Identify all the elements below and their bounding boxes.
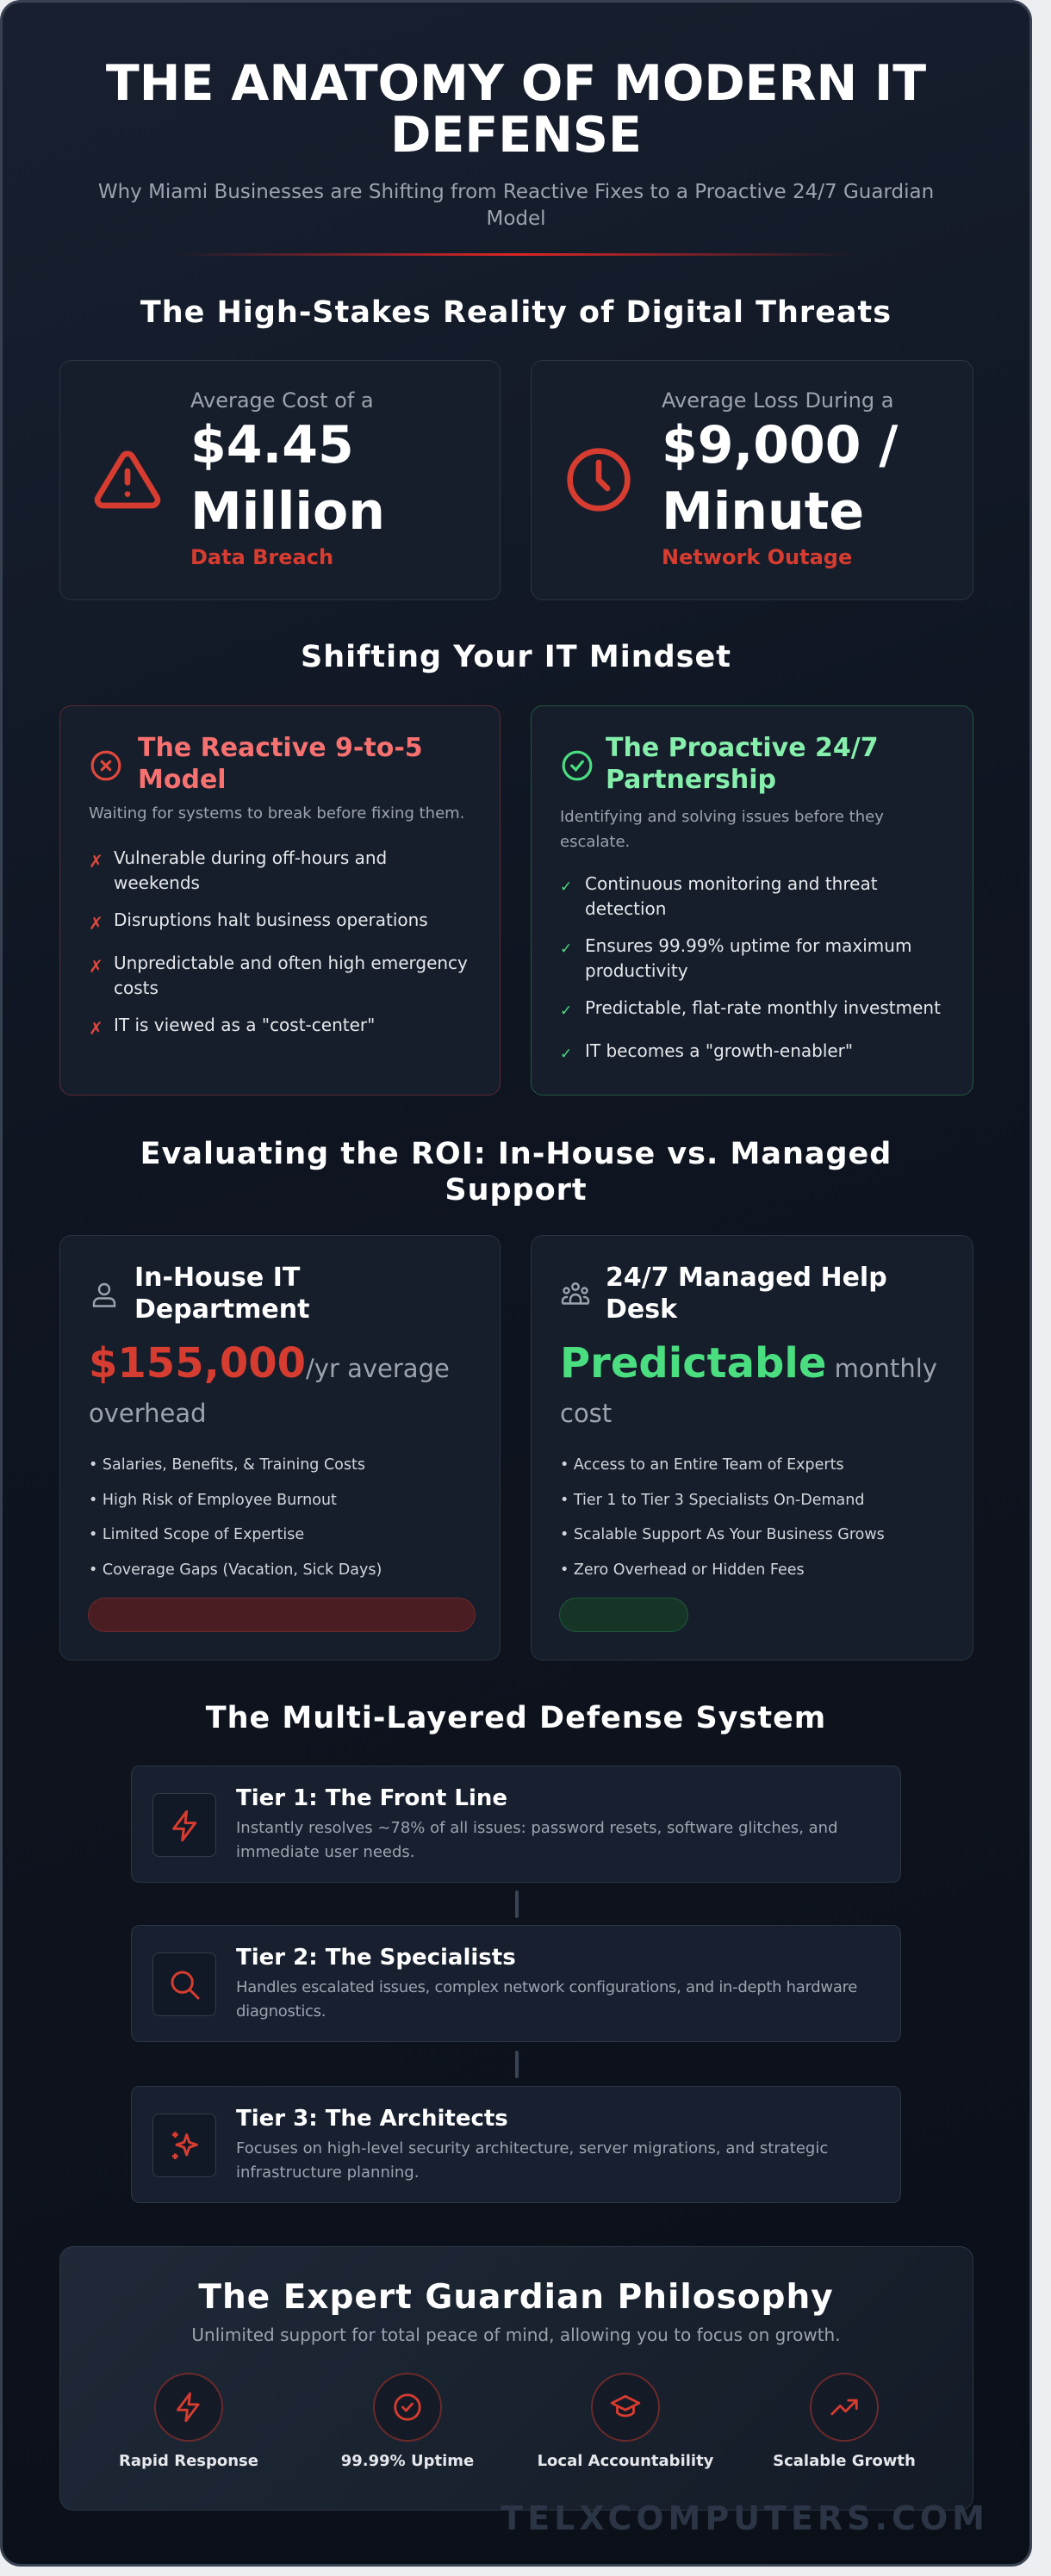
- card title: Model: [138, 765, 227, 795]
- card title: 24/7 Managed Help: [606, 1263, 887, 1293]
- list: benefits: ✓: [560, 1002, 572, 1020]
- description: Identifying and solving issues before they: [560, 808, 884, 826]
- price: $155,000/yr average overhead: [89, 1339, 450, 1428]
- card title: [606, 733, 879, 795]
- card title: Department: [134, 1294, 309, 1325]
- title: DEFENSE: [390, 107, 642, 164]
- card title: In-House IT: [134, 1263, 300, 1293]
- card title: [138, 733, 423, 795]
- list: benefits: Predictable, flat-rate monthly investment: [585, 997, 941, 1018]
- philosophy title: The Expert Guardian Philosophy: [198, 2278, 834, 2317]
- bar: cost: [88, 1598, 476, 1632]
- watermark: TELXCOMPUTERS.COM: [501, 2499, 989, 2537]
- list: drawbacks: weekends: [114, 872, 200, 893]
- panel: outage stat: [531, 360, 973, 600]
- list: benefits: • Tier 1 to Tier 3 Specialists On-Demand: [560, 1492, 864, 1509]
- list: drawbacks: ✗: [89, 1018, 103, 1039]
- price: Predictable monthly cost: [560, 1339, 937, 1428]
- list: benefits: • Scalable Support As Your Business Grows: [560, 1526, 885, 1543]
- panel: managed help desk: [531, 1235, 973, 1660]
- list: drawbacks: ✗: [89, 913, 103, 934]
- label: Scalable Growth: [773, 2452, 916, 2470]
- heading: high-stakes: The High-Stakes Reality of Digital Threats: [140, 295, 892, 330]
- list: benefits: Continuous monitoring and threat: [585, 873, 878, 894]
- stat text: Average Loss During a: [662, 388, 893, 413]
- stat text: Average Cost of a: [190, 388, 374, 413]
- icon: warning triangle: [95, 451, 160, 508]
- icon: x circle: [91, 751, 121, 780]
- connector: [515, 2051, 519, 2078]
- list: benefits: ✓: [560, 1046, 572, 1063]
- card title: [606, 1263, 887, 1325]
- panel: reactive model: [59, 705, 501, 1096]
- description: Waiting for systems to break before fixing them.: [89, 804, 464, 822]
- tier 3: Focuses on high-level security architecture, server migrations, and strategic infrastructure planning.: [236, 2139, 828, 2182]
- stat text: Minute: [662, 481, 864, 542]
- icon: check circle: [562, 751, 593, 780]
- heading: defense system: The Multi-Layered Defense System: [206, 1701, 826, 1735]
- icon: team: [562, 1282, 589, 1305]
- heading: ROI: Support: [445, 1173, 588, 1207]
- list: benefits: [560, 873, 941, 1063]
- tier 1: Tier 1: The Front Line: [236, 1785, 507, 1811]
- stat text: Data Breach: [190, 545, 333, 569]
- list: drawbacks: IT is viewed as a "cost-center": [114, 1015, 375, 1035]
- list: benefits: productivity: [585, 960, 688, 981]
- panel: philosophy: [59, 2246, 973, 2511]
- panel: proactive model: [531, 705, 973, 1096]
- heading: mindset: Shifting Your IT Mindset: [301, 640, 731, 674]
- icon: trend: [810, 2373, 879, 2442]
- stat text: Million: [190, 481, 385, 542]
- icon: uptime: [373, 2373, 442, 2442]
- list: costs: • High Risk of Employee Burnout: [89, 1492, 337, 1509]
- card title: [134, 1263, 309, 1325]
- list: drawbacks: ✗: [89, 851, 103, 872]
- icon: clock: [567, 448, 631, 512]
- icon: person: [93, 1283, 115, 1307]
- list: drawbacks: [89, 847, 468, 1039]
- label: Rapid Response: [119, 2452, 258, 2470]
- tier 2: [131, 1925, 901, 2042]
- icon: sparkles: [152, 2114, 216, 2177]
- list: costs: • Salaries, Benefits, & Training Costs: [89, 1456, 365, 1474]
- list: drawbacks: ✗: [89, 956, 103, 977]
- list: drawbacks: costs: [114, 978, 159, 998]
- tier 1: [131, 1766, 901, 1883]
- list: benefits: detection: [585, 898, 666, 919]
- title: THE ANATOMY OF MODERN IT: [106, 55, 926, 112]
- philosophy subtitle: Unlimited support for total peace of mind, allowing you to focus on growth.: [191, 2325, 841, 2345]
- tier 2: Handles escalated issues, complex network configurations, and in-depth hardware diagnostics.: [236, 1978, 857, 2020]
- icon: rapid response: [154, 2373, 223, 2442]
- stat text: $9,000 /: [662, 415, 898, 475]
- stat text: $4.45: [190, 415, 354, 475]
- stat text: [662, 388, 898, 569]
- list: costs: [89, 1456, 382, 1578]
- connector: [515, 1890, 519, 1918]
- stat text: Network Outage: [662, 545, 852, 569]
- list: benefits: Ensures 99.99% uptime for maximum: [585, 935, 911, 956]
- list: benefits: • Access to an Entire Team of Experts: [560, 1456, 844, 1474]
- list: drawbacks: Unpredictable and often high emergency: [114, 953, 468, 973]
- subtitle: Why Miami Businesses are Shifting from Reactive Fixes to a Proactive 24/7 Guardian Model: [98, 181, 934, 230]
- label: Local Accountability: [538, 2452, 713, 2470]
- list: drawbacks: Vulnerable during off-hours and: [114, 847, 387, 868]
- label: 99.99% Uptime: [341, 2452, 474, 2470]
- title: [106, 55, 926, 164]
- heading: ROI: [140, 1137, 892, 1207]
- tier 1: Instantly resolves ~78% of all issues: password resets, software glitches, and immediate user needs.: [236, 1819, 838, 1861]
- card title: Desk: [606, 1294, 677, 1325]
- list: benefits: ✓: [560, 878, 572, 896]
- list: benefits: ✓: [560, 940, 572, 958]
- list: costs: • Coverage Gaps (Vacation, Sick Days): [89, 1561, 382, 1578]
- description: [560, 808, 884, 851]
- list: costs: • Limited Scope of Expertise: [89, 1526, 304, 1543]
- stat text: [190, 388, 385, 569]
- panel: data breach stat: [59, 360, 501, 600]
- heading: ROI: Evaluating the ROI: In-House vs. Managed: [140, 1137, 892, 1171]
- list: benefits: • Zero Overhead or Hidden Fees: [560, 1561, 805, 1578]
- divider: red gradient: [172, 253, 860, 256]
- list: drawbacks: Disruptions halt business operations: [114, 909, 428, 930]
- tier 3: [131, 2086, 901, 2203]
- icon: graduation cap: [591, 2373, 660, 2442]
- card title: The Reactive 9-to-5: [138, 733, 423, 763]
- card title: Partnership: [606, 765, 776, 795]
- panel: in-house IT: [59, 1235, 501, 1660]
- list: benefits: IT becomes a "growth-enabler": [585, 1040, 853, 1061]
- description: escalate.: [560, 833, 630, 851]
- bar: cost: [559, 1598, 688, 1632]
- list: benefits: [560, 1456, 885, 1578]
- tier 3: Tier 3: The Architects: [236, 2106, 508, 2132]
- icon: magnifier: [152, 1952, 216, 2016]
- card title: The Proactive 24/7: [606, 733, 879, 763]
- icon: lightning: [152, 1793, 216, 1857]
- tier 2: Tier 2: The Specialists: [236, 1945, 516, 1971]
